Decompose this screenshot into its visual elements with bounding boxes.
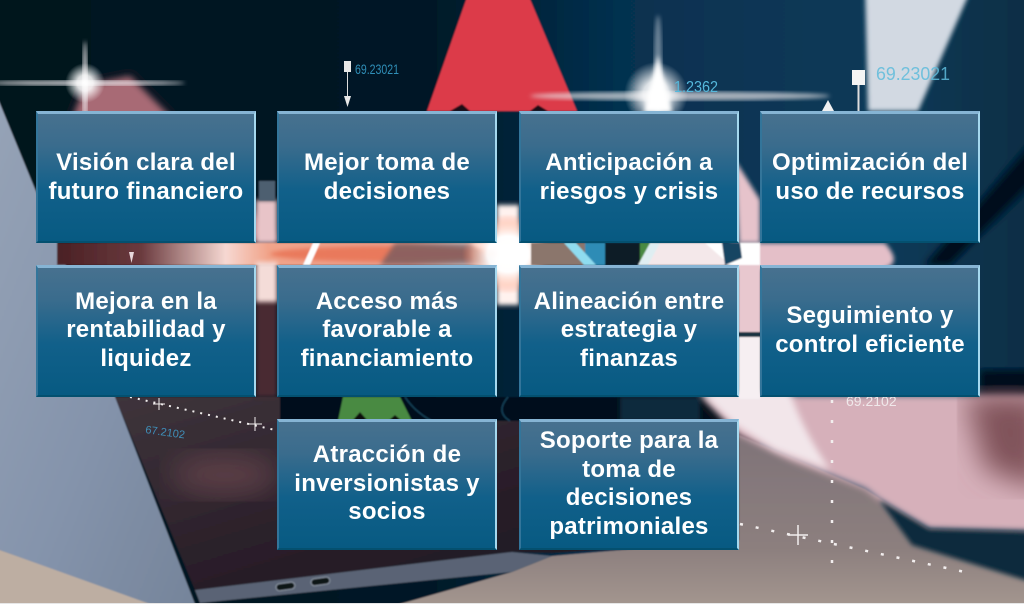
- card: Soporte: Soporte para la: [540, 427, 718, 454]
- chart label 1.2362: 1.2362: [674, 79, 718, 96]
- chart arcs: [405, 397, 510, 421]
- card: Seguimiento: Seguimiento y: [786, 302, 954, 329]
- chart marker triangle: [822, 100, 834, 111]
- gap square: [259, 181, 275, 201]
- card: Alineación: estrategia y: [561, 316, 697, 343]
- card: Atracción: Atracción de: [313, 441, 461, 468]
- central flare band: [57, 243, 760, 265]
- card: Visión clara: futuro financiero: [49, 178, 243, 204]
- card: Alineación: Alineación entre: [534, 288, 724, 315]
- card: Acceso: Acceso más: [316, 288, 458, 315]
- card: Atracción: socios: [348, 498, 426, 525]
- card: Mejor toma: Mejor toma de: [304, 149, 470, 176]
- green triangle: [338, 397, 412, 421]
- chart label 69.2102: 69.2102: [846, 393, 897, 409]
- card: Seguimiento: control eficiente: [775, 330, 965, 358]
- card: Mejora: Mejora en la: [75, 288, 217, 315]
- card: Mejora: liquidez: [100, 345, 192, 372]
- card: Mejor toma: decisiones: [324, 178, 450, 204]
- card: Soporte: decisiones: [566, 484, 692, 511]
- hand shadow: [879, 500, 1024, 586]
- chart marker 69.23021 light: 69.23021: [876, 64, 950, 84]
- keyboard: [115, 397, 760, 590]
- hand main: [700, 395, 1024, 532]
- card: Alineación: finanzas: [580, 345, 678, 372]
- bottom edge: [0, 603, 1024, 604]
- table left: [0, 543, 210, 604]
- card: Mejor toma: [277, 111, 497, 243]
- laptop ports: [276, 577, 330, 591]
- maroon area below hand: [256, 265, 277, 397]
- finger in row gap: [730, 243, 894, 270]
- pink hand blur upper left: [60, 76, 277, 240]
- card: Soporte: patrimoniales: [549, 512, 709, 540]
- flare right: [530, 15, 830, 126]
- flare left: [0, 41, 185, 125]
- chart marker 69.23021 light: [852, 64, 950, 111]
- notch in red triangle: [450, 104, 470, 111]
- dark streak right: [925, 130, 1024, 265]
- dotted chart lines: [130, 397, 965, 572]
- card: Optimización: Optimización del: [772, 149, 968, 176]
- red triangle: [427, 0, 577, 111]
- card: Alineación: [519, 265, 739, 397]
- card: Atracción: inversionistas y: [294, 470, 480, 497]
- small arrow: [129, 252, 134, 263]
- card: Anticipación: riesgos y crisis: [540, 178, 718, 204]
- chart label 67.2102: 67.2102: [145, 424, 186, 442]
- laptop front edge: [195, 552, 552, 603]
- card: Atracción: [277, 419, 497, 550]
- laptop lid: [0, 55, 195, 604]
- card: Seguimiento: [760, 265, 980, 397]
- chart marker 69.23021 dark: 69.23021: [355, 61, 399, 77]
- pale finger top: [865, 0, 975, 111]
- card: Mejora: rentabilidad y: [66, 316, 226, 343]
- card: Acceso: financiamiento: [301, 345, 473, 372]
- card: Mejora: [36, 265, 256, 397]
- card: Acceso: [277, 265, 497, 397]
- card: Visión clara: Visión clara del: [56, 149, 236, 176]
- card: Optimización: [760, 111, 980, 243]
- card: Soporte: [519, 419, 739, 550]
- card: Optimización: uso de recursos: [775, 178, 965, 204]
- card: Acceso: favorable a: [322, 316, 452, 343]
- table right: [330, 435, 1024, 604]
- card: Anticipación: Anticipación a: [545, 149, 713, 176]
- card: Visión clara: [36, 111, 256, 243]
- card: Anticipación: [519, 111, 739, 243]
- card: Soporte: toma de: [582, 456, 676, 482]
- finger between cards: [735, 160, 760, 243]
- keyboard reflection: [170, 453, 280, 497]
- chart marker 69.23021 dark: [344, 61, 399, 107]
